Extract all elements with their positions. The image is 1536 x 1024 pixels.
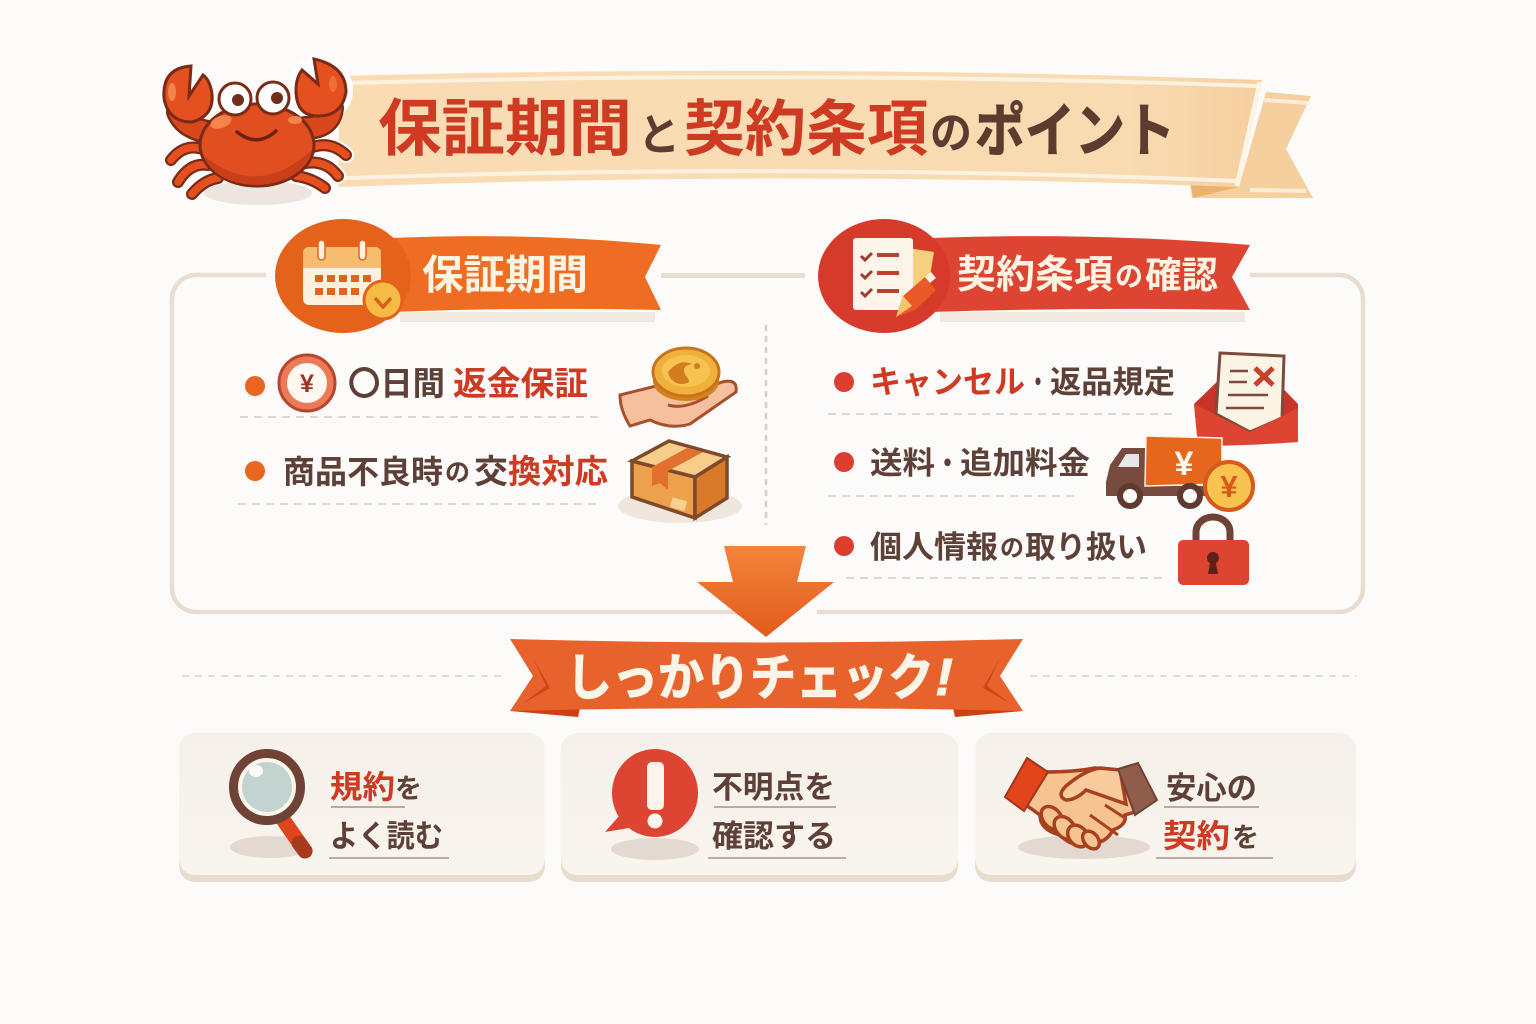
list item: cancellation: 返品規定 [1050, 365, 1175, 400]
card text: 不明点を [712, 770, 835, 805]
panel: warranty heading [275, 219, 661, 333]
divider [765, 325, 767, 525]
card: read terms [179, 733, 545, 882]
list item: privacy [834, 530, 1147, 565]
list text: 個人情報 [870, 530, 998, 565]
card: ask questions [561, 733, 958, 882]
icon: yen badge: ¥ [300, 370, 314, 398]
list text: 送料 [870, 446, 935, 481]
icon: truck and yen coin: ¥ [1175, 445, 1194, 483]
icon: padlock [1178, 517, 1249, 585]
card: read terms: を [395, 774, 422, 804]
icon: checklist and pencil [853, 238, 936, 317]
heading text: 保証期間 [422, 252, 588, 298]
card: ask questions: 確認する [712, 819, 836, 854]
list text: キャンセル [870, 364, 1025, 400]
banner text: しっかりチェック [566, 650, 934, 706]
icon: exclamation bubble [605, 749, 699, 860]
banner: check: ! [935, 649, 953, 707]
banner: check [510, 639, 1023, 717]
title ribbon: の [930, 109, 972, 158]
ribbon body [338, 71, 1262, 187]
divider lines [182, 675, 1356, 677]
icon: calendar [303, 240, 402, 319]
icon: truck and yen coin: ¥ [1220, 469, 1238, 504]
icon: crab mascot [164, 59, 348, 205]
panel: contract heading: 確認 [1145, 255, 1218, 296]
list item: privacy: 取り扱い [1025, 530, 1147, 565]
list item: exchange: 交 [474, 453, 508, 490]
panel: contract heading: の [1115, 261, 1143, 292]
panel: main frame [172, 268, 1363, 618]
arrow: down [697, 546, 834, 637]
icon: coins on hand [620, 348, 736, 426]
list item: shipping [834, 446, 1090, 481]
crab eyes [219, 83, 251, 115]
title ribbon: と [638, 111, 680, 160]
list item: cancellation: ・ [1028, 367, 1048, 400]
list text: 商品不良時 [283, 454, 443, 490]
icon: cardboard box [618, 441, 742, 523]
icon: magnifier [230, 754, 310, 858]
icon: handshake [1005, 758, 1157, 859]
list item: shipping: 追加料金 [960, 446, 1090, 481]
list text: 〇日間 [348, 365, 445, 402]
title ribbon [338, 71, 1313, 198]
crab claws [164, 66, 212, 122]
card text: 規約 [330, 769, 395, 805]
list item: cancellation [834, 364, 1175, 400]
crab legs [171, 108, 346, 194]
list item: shipping: ・ [935, 448, 960, 481]
list item: privacy: の [1000, 535, 1024, 562]
icon: yen badge [279, 355, 335, 411]
title ribbon: ポイント [975, 99, 1175, 164]
title text: 保証期間 [378, 95, 632, 164]
list item: money-back: 返金保証 [453, 365, 588, 402]
card: read terms: よく読む [330, 819, 443, 854]
card text: 安心の [1166, 771, 1257, 806]
card: safe contract: 契約 [1163, 818, 1230, 854]
card: safe contract [975, 733, 1356, 882]
title ribbon: 契約条項 [684, 95, 928, 163]
list item: exchange: の [445, 459, 470, 487]
icon: truck and yen coin [1106, 436, 1253, 510]
card: safe contract: を [1232, 823, 1259, 853]
list item: money-back [245, 355, 588, 411]
ribbon tail [1190, 92, 1313, 198]
list item: exchange: 換対応 [508, 453, 608, 490]
list item: exchange [245, 453, 608, 490]
panel: contract heading [818, 219, 1250, 333]
icon: envelope with letter [1194, 353, 1298, 446]
crab body [200, 104, 314, 186]
heading text: 契約条項 [957, 254, 1113, 297]
